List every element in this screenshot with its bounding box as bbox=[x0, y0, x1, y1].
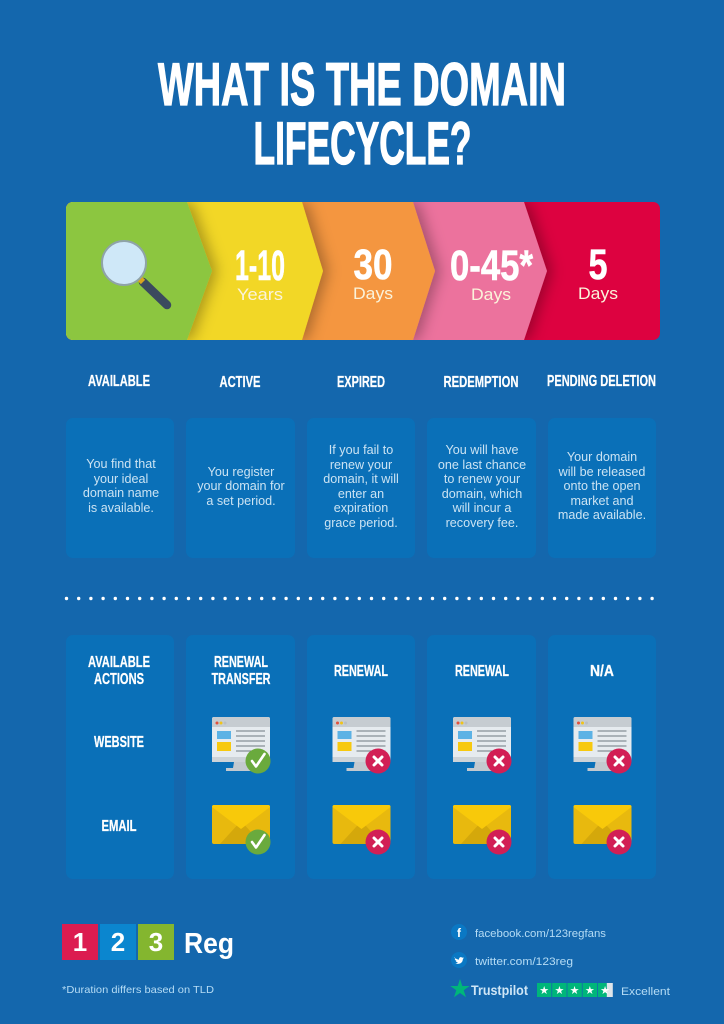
panel: available description: your ideal bbox=[94, 472, 148, 486]
panel: row labels: AVAILABLE bbox=[88, 654, 150, 671]
panel: expired description: If you fail to bbox=[329, 443, 393, 457]
panel: available description: You find that bbox=[86, 457, 156, 471]
title bbox=[158, 51, 566, 177]
footnote: *Duration differs based on TLD bbox=[62, 984, 214, 996]
logo: 123 Reg bbox=[62, 924, 234, 960]
trustpilot rating bbox=[450, 979, 670, 998]
panel: row labels bbox=[66, 635, 174, 879]
panel: expired description bbox=[307, 418, 415, 558]
trustpilot rating: Trustpilot bbox=[471, 982, 528, 998]
stage: redemption duration: Days bbox=[471, 285, 511, 304]
panel: active description: You register bbox=[208, 465, 274, 479]
panel: redemption description: domain, which bbox=[442, 487, 522, 501]
panel: active description: your domain for bbox=[197, 479, 285, 493]
panel: expired description: expiration bbox=[334, 501, 388, 515]
panel: redemption description: to renew your bbox=[444, 472, 520, 486]
panel: row labels: WEBSITE bbox=[94, 734, 144, 751]
stage: redemption duration: 0-45* bbox=[450, 242, 533, 290]
stage headings: AVAILABLE bbox=[88, 373, 150, 390]
panel: expired actions: RENEWAL bbox=[334, 663, 388, 680]
stage headings bbox=[88, 373, 656, 391]
lifecycle chevron bar bbox=[60, 202, 660, 340]
logo: 123 Reg: 3 bbox=[149, 927, 163, 957]
stage: expired duration: 30 bbox=[354, 241, 392, 289]
stage: active duration: 1-10 bbox=[235, 242, 285, 290]
panel: pending deletion actions bbox=[548, 635, 656, 879]
panel: active description: a set period. bbox=[206, 494, 276, 508]
stage headings: REDEMPTION bbox=[444, 374, 518, 391]
panel: pending deletion description: market and bbox=[570, 494, 634, 508]
stage: active duration bbox=[235, 242, 285, 304]
panel: pending deletion description: onto the open bbox=[563, 479, 641, 493]
panel: active actions bbox=[186, 635, 295, 879]
panel: redemption description: will incur a bbox=[452, 501, 511, 515]
trustpilot rating: Excellent bbox=[621, 986, 670, 998]
panel: available description bbox=[66, 418, 174, 558]
icon: email blocked bbox=[453, 805, 512, 854]
panel: active actions: RENEWAL bbox=[214, 654, 268, 671]
panel: redemption actions bbox=[427, 635, 536, 879]
panel: pending deletion description: made available. bbox=[558, 508, 646, 522]
panel: expired description: enter an bbox=[338, 487, 384, 501]
panel: pending deletion description: will be released bbox=[558, 465, 645, 479]
facebook link: facebook.com/123regfans bbox=[475, 928, 607, 940]
panel: expired description: domain, it will bbox=[323, 472, 399, 486]
panel: row labels: EMAIL bbox=[102, 818, 137, 835]
panel: active actions: TRANSFER bbox=[212, 671, 271, 688]
stage: pending deletion duration bbox=[578, 241, 618, 303]
panel: pending deletion actions: N/A bbox=[590, 663, 614, 680]
trustpilot rating: ★ bbox=[554, 985, 564, 997]
icon: website blocked bbox=[332, 717, 390, 774]
stage: pending deletion duration: 5 bbox=[588, 241, 608, 289]
panel: redemption description: You will have bbox=[445, 443, 519, 457]
icon: email allowed bbox=[212, 805, 270, 854]
dotted divider bbox=[66, 597, 653, 600]
panel: row labels: ACTIONS bbox=[94, 671, 144, 688]
stage: active duration: Years bbox=[237, 285, 283, 304]
panel: redemption description: one last chance bbox=[438, 458, 526, 472]
panel: expired actions bbox=[307, 635, 415, 879]
panel: pending deletion description bbox=[548, 418, 656, 558]
panel: available description: domain name bbox=[83, 486, 159, 500]
panel: available description: is available. bbox=[88, 501, 154, 515]
icon: website blocked bbox=[574, 717, 632, 774]
facebook link bbox=[451, 924, 607, 940]
panel: pending deletion description: Your domain bbox=[567, 450, 637, 464]
stage: pending deletion duration: Days bbox=[578, 284, 618, 303]
logo: 123 Reg: 2 bbox=[111, 927, 125, 957]
icon: website allowed bbox=[212, 717, 270, 774]
twitter link bbox=[451, 952, 573, 968]
icon: website blocked bbox=[453, 717, 512, 774]
stage: expired duration bbox=[353, 241, 393, 303]
trustpilot rating: ★ bbox=[600, 985, 610, 997]
stage headings: ACTIVE bbox=[220, 374, 261, 391]
stage headings: EXPIRED bbox=[337, 374, 385, 391]
panel: redemption description bbox=[427, 418, 536, 558]
trustpilot rating: ★ bbox=[585, 985, 595, 997]
panel: redemption description: recovery fee. bbox=[446, 516, 518, 530]
trustpilot rating: ★ bbox=[570, 985, 580, 997]
panel: expired description: grace period. bbox=[324, 516, 398, 530]
logo: 123 Reg: Reg bbox=[184, 928, 234, 960]
logo: 123 Reg: 1 bbox=[73, 927, 87, 957]
panel: redemption actions: RENEWAL bbox=[455, 663, 509, 680]
facebook link: f bbox=[457, 926, 462, 940]
panel: active description bbox=[186, 418, 295, 558]
icon: magnifying glass bbox=[102, 241, 167, 305]
twitter link: twitter.com/123reg bbox=[475, 956, 573, 968]
trustpilot rating: ★ bbox=[539, 985, 549, 997]
panel: expired description: renew your bbox=[330, 458, 392, 472]
title: LIFECYCLE? bbox=[254, 110, 472, 177]
stage: redemption duration bbox=[450, 242, 533, 304]
icon: email blocked bbox=[574, 805, 632, 854]
stage: expired duration: Days bbox=[353, 284, 393, 303]
stage headings: PENDING DELETION bbox=[547, 373, 656, 390]
icon: email blocked bbox=[332, 805, 390, 854]
